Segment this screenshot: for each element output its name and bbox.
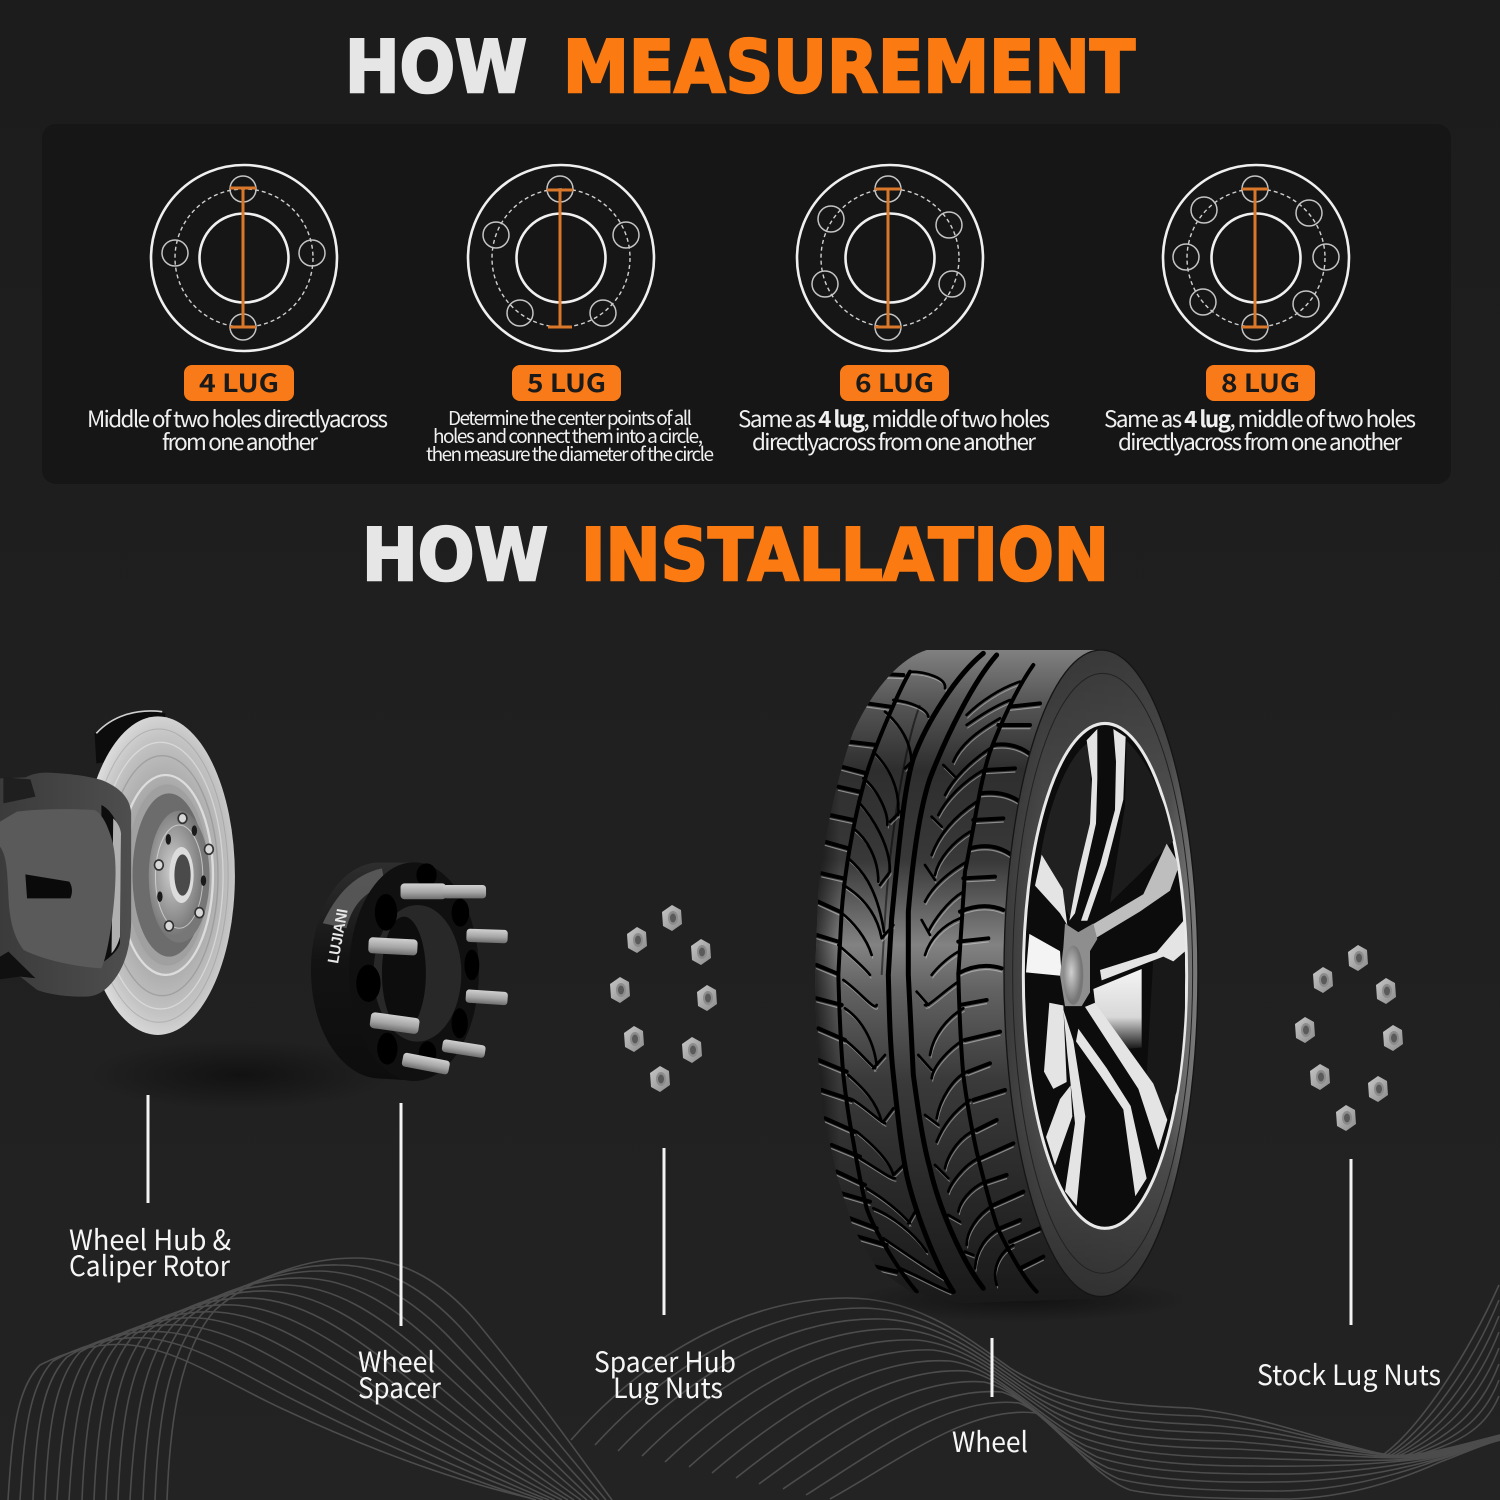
text: 5 lug description: holes and connect them into a circle, xyxy=(433,422,703,449)
rotor disc xyxy=(81,716,235,1035)
rim xyxy=(1023,723,1187,1228)
text: 6 lug description xyxy=(738,402,1050,457)
diagram: 5 lug xyxy=(468,165,654,351)
text: 4 lug description: Middle of two holes directlyacross xyxy=(87,402,388,434)
label: wheel hub and caliper rotor: Caliper Rotor xyxy=(69,1245,230,1285)
studs xyxy=(368,883,508,1075)
spacer body xyxy=(311,863,414,1081)
text: 8 lug description xyxy=(1104,402,1416,457)
label: spacer hub lug nuts xyxy=(594,1148,736,1407)
badge: 4 lug: 4 LUG xyxy=(199,364,279,400)
title: how installation: HOW xyxy=(362,513,548,597)
hub face xyxy=(149,811,210,943)
panel: measurement xyxy=(42,124,1451,484)
text: 6 lug description: directlyacross from one another xyxy=(752,425,1036,457)
label: stock lug nuts xyxy=(1257,1159,1441,1394)
text: 5 lug description: then measure the diameter of the circle xyxy=(426,440,714,467)
diagram: 4 lug xyxy=(151,165,337,351)
diagram: 8 lug xyxy=(1163,165,1349,351)
shadows under parts xyxy=(90,1040,1190,1322)
badge: 4 lug xyxy=(184,364,294,401)
decorative wave lines xyxy=(8,1258,1500,1500)
image: stock lug nuts xyxy=(1295,945,1403,1131)
title: how measurement: HOW xyxy=(345,25,527,109)
text: 6 lug description: Same as 4 lug, middle of two holes xyxy=(738,402,1050,434)
label: stock lug nuts: Stock Lug Nuts xyxy=(1257,1354,1441,1394)
label: wheel: Wheel xyxy=(952,1421,1028,1461)
text: 5 lug description xyxy=(426,404,714,467)
text: 8 lug description: directlyacross from one another xyxy=(1118,425,1402,457)
text: 8 lug description: Same as 4 lug, middle of two holes xyxy=(1104,402,1416,434)
label: spacer hub lug nuts: Spacer Hub xyxy=(594,1341,736,1381)
spacer face xyxy=(349,862,479,1081)
badge: 8 lug: 8 LUG xyxy=(1221,364,1300,400)
image: wheel spacer xyxy=(311,862,508,1081)
image: spacer hub lug nuts xyxy=(610,905,717,1092)
tire tread and sidewall xyxy=(810,645,1198,1308)
label: wheel spacer xyxy=(358,1103,441,1407)
label: wheel xyxy=(952,1338,1028,1461)
title: how installation xyxy=(362,513,1109,597)
badge: 6 lug xyxy=(840,364,949,401)
text: 5 lug description: Determine the center points of all xyxy=(448,404,692,431)
badge: 6 lug: 6 LUG xyxy=(855,364,934,400)
label: wheel spacer: Spacer xyxy=(358,1367,441,1407)
badge: 5 lug xyxy=(512,364,621,401)
logo text: LUJIANI xyxy=(325,908,352,965)
label: wheel hub and caliper rotor xyxy=(69,1095,231,1285)
title: how measurement: MEASUREMENT xyxy=(563,25,1135,109)
title: how measurement xyxy=(345,25,1135,109)
text: 4 lug description: from one another xyxy=(162,425,318,457)
text: 4 lug description xyxy=(87,402,388,457)
label: wheel hub and caliper rotor: Wheel Hub & xyxy=(69,1219,231,1259)
title: how installation: INSTALLATION xyxy=(581,513,1109,597)
diagram: 6 lug xyxy=(797,165,983,351)
image: wheel hub, caliper and rotor xyxy=(0,711,235,1035)
badge: 5 lug: 5 LUG xyxy=(527,364,606,400)
label: spacer hub lug nuts: Lug Nuts xyxy=(613,1367,723,1407)
label: wheel spacer: Wheel xyxy=(358,1341,435,1381)
caliper xyxy=(0,773,131,997)
image: wheel and tire xyxy=(810,645,1198,1308)
badge: 8 lug xyxy=(1206,364,1315,401)
